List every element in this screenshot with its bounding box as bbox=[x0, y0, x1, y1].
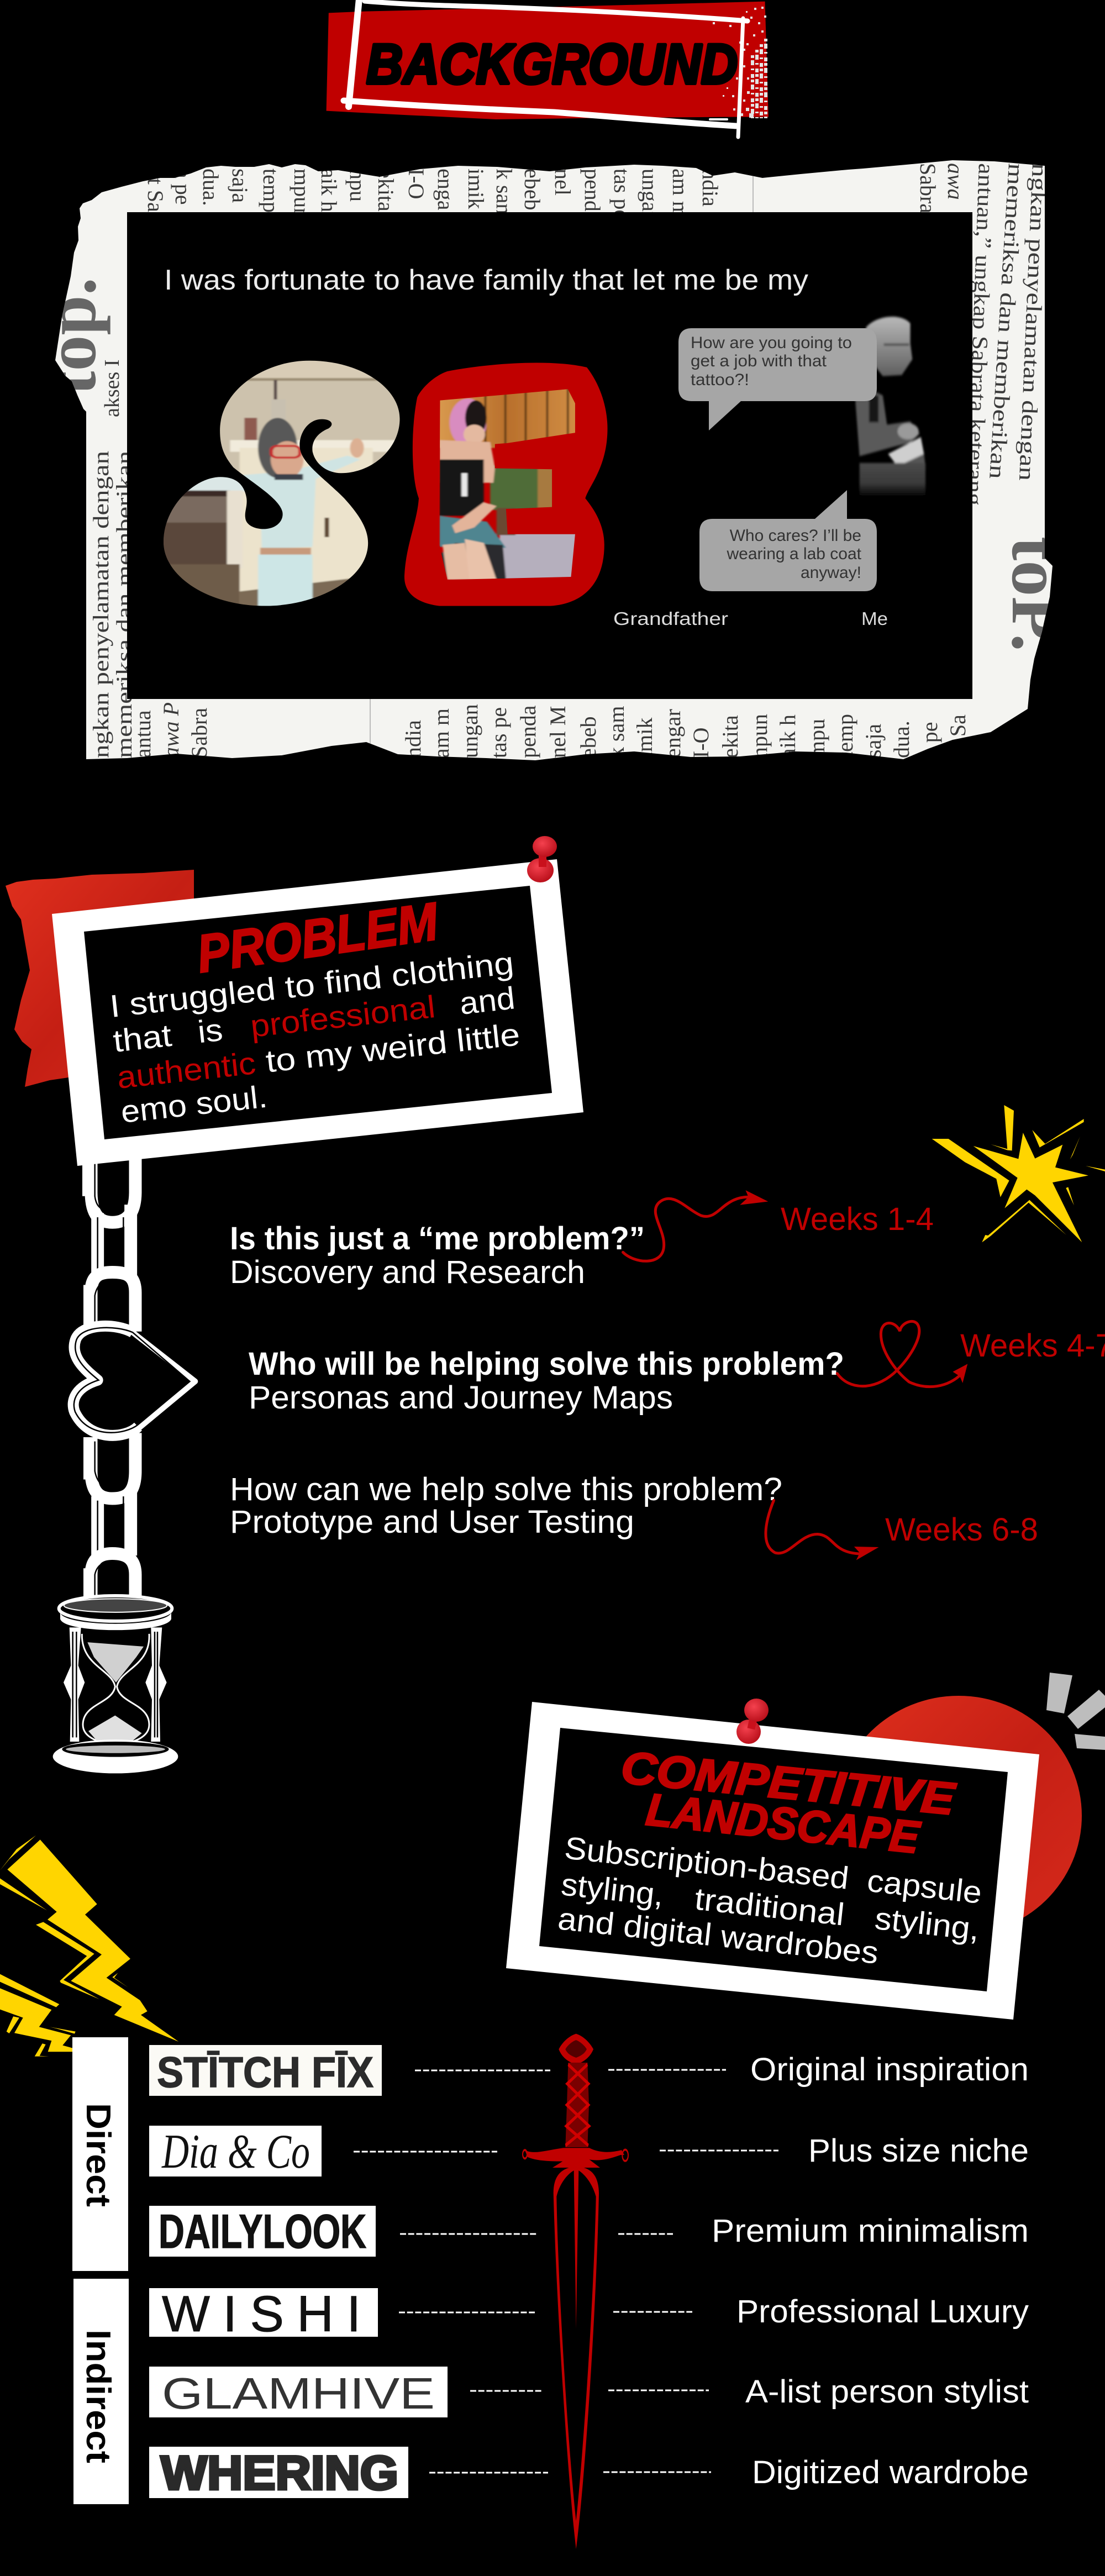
problem text: authentic bbox=[115, 1045, 257, 1096]
heading: competitive: COMPETITIVE bbox=[619, 1742, 958, 1825]
heading: landscape: LANDSCAPE bbox=[644, 1784, 923, 1863]
problem text: to my weird little bbox=[264, 1017, 522, 1080]
label: indirect bbox=[73, 2279, 129, 2504]
grip bbox=[565, 2063, 589, 2147]
landscape text: traditional bbox=[693, 1881, 846, 1933]
grey burst dashes bbox=[1046, 1673, 1105, 1750]
newspaper text: top band: I-O bbox=[404, 169, 429, 199]
speech bubble: grandfather: How are you going to bbox=[691, 334, 852, 352]
photo: grandfather bbox=[855, 317, 925, 497]
newspaper text: bottom band: ndia bbox=[401, 720, 425, 758]
newspaper text: top band: tas pe bbox=[609, 169, 634, 219]
newspaper text: bottom band: ungan bbox=[457, 704, 482, 758]
landscape text: Subscription-based bbox=[563, 1830, 850, 1896]
newspaper text: bottom band: I-O bbox=[688, 727, 713, 758]
step 2 text: Who will be helping solve this problem? bbox=[249, 1346, 844, 1382]
newspaper text: top band: pend bbox=[580, 169, 605, 212]
newspaper text: bottom band: awa P bbox=[159, 702, 183, 758]
newspaper text: top band: antuan,” ungkap Sabrata keterang bbox=[962, 163, 999, 506]
red title block bbox=[327, 2, 769, 119]
icon: yellow starburst bbox=[932, 1105, 1105, 1242]
panel: background story bbox=[127, 212, 972, 699]
step 1 text bbox=[230, 1221, 645, 1290]
white speckle texture bbox=[713, 7, 766, 118]
problem card bbox=[52, 836, 583, 1166]
newspaper text: bottom band: npun bbox=[747, 714, 772, 758]
problem text: and bbox=[458, 980, 517, 1022]
newspaper text: top band: Sabra bbox=[915, 163, 940, 213]
card inner panel bbox=[539, 1728, 1008, 1991]
newspaper text: bottom band: nel M bbox=[545, 706, 570, 758]
white card frame bbox=[506, 1702, 1039, 2020]
chain links bbox=[73, 1150, 195, 1602]
newspaper text: bottom band: am m bbox=[429, 708, 454, 758]
competitor descriptors: Professional Luxury bbox=[736, 2294, 1029, 2330]
intro sentence: I was fortunate to have family that let me be my bbox=[164, 264, 808, 296]
problem text: I struggled to find clothing bbox=[108, 945, 515, 1024]
newspaper text: bottom band: aik h bbox=[775, 714, 800, 758]
step 3 text: Prototype and User Testing bbox=[230, 1504, 634, 1540]
newspaper text: top band: imik bbox=[464, 169, 488, 209]
arrow: squiggle to weeks 6-8 bbox=[766, 1500, 879, 1560]
newspaper text: top band: awa bbox=[943, 163, 968, 200]
problem text: emo soul. bbox=[119, 1079, 269, 1130]
hourglass bbox=[53, 1596, 178, 1773]
pommel bbox=[559, 2034, 593, 2064]
competitor descriptors: A-list person stylist bbox=[745, 2374, 1029, 2410]
newspaper text: top band bbox=[143, 162, 1053, 506]
logo: dailylook: DAILYLOOK bbox=[159, 2205, 366, 2258]
newspaper text: top band: ungan bbox=[638, 169, 662, 223]
newspaper text: top band: ngkan penyelamatan dengan bbox=[1014, 163, 1053, 481]
newspaper text: top band: nel bbox=[550, 169, 575, 196]
newspaper text: bottom band: Sabra bbox=[187, 708, 212, 758]
label: weeks 6-8: Weeks 6-8 bbox=[885, 1512, 1038, 1548]
white card frame bbox=[52, 859, 583, 1166]
newspaper text: top band: aik h bbox=[317, 169, 341, 212]
label: direct: Direct bbox=[79, 2103, 117, 2207]
connector dashes bbox=[354, 2070, 778, 2473]
title text: BACKGROUND bbox=[366, 33, 738, 96]
pin bbox=[527, 836, 557, 882]
label: weeks 1-4: Weeks 1-4 bbox=[781, 1201, 934, 1237]
newspaper text: top band: at Sa bbox=[143, 169, 168, 212]
step 3 text: How can we help solve this problem? bbox=[230, 1471, 782, 1507]
speech bubble: me bbox=[699, 490, 877, 591]
problem heading: PROBLEM bbox=[193, 892, 442, 984]
problem text: professional bbox=[249, 989, 437, 1044]
newspaper text: top band: ekita bbox=[373, 169, 398, 212]
landscape text bbox=[556, 1830, 983, 1971]
panel: torn newspaper bbox=[31, 155, 1076, 768]
caption: me: Me bbox=[861, 608, 888, 629]
arrows bbox=[623, 1190, 967, 1560]
arrow: squiggle to weeks 1-4 bbox=[623, 1190, 768, 1261]
step 1 text: Is this just a “me problem?” bbox=[230, 1221, 645, 1257]
newspaper text: right headline: toP. bbox=[997, 537, 1076, 651]
newspaper text: top band: memeriksa dan memberikan bbox=[985, 162, 1029, 480]
newspaper text: bottom band bbox=[130, 702, 970, 758]
newspaper text: left band bbox=[31, 277, 136, 758]
speech bubble: grandfather bbox=[678, 328, 877, 430]
competitor descriptors bbox=[712, 2052, 1029, 2490]
landscape text: styling, bbox=[560, 1867, 665, 1913]
problem text: that bbox=[111, 1018, 173, 1059]
problem text bbox=[108, 945, 522, 1130]
competitor descriptors: Premium minimalism bbox=[712, 2213, 1029, 2249]
newspaper text: top band: temp bbox=[259, 169, 283, 213]
competitor descriptors: Digitized wardrobe bbox=[752, 2454, 1029, 2490]
newspaper text: left band: top. bbox=[31, 277, 111, 395]
competitive landscape card bbox=[506, 1699, 1039, 2020]
newspaper text: top band: k san bbox=[492, 169, 517, 214]
newspaper text: bottom band: antua bbox=[130, 710, 155, 758]
arrow: heart to weeks 4-7 bbox=[837, 1321, 967, 1387]
photo letter S: childhood photo bbox=[164, 360, 400, 606]
logo: wishi: WISHI bbox=[162, 2286, 361, 2342]
newspaper text: top band: enga bbox=[433, 169, 458, 211]
newspaper text: bottom band: ebeb bbox=[576, 716, 601, 758]
newspaper text: top band: am m bbox=[668, 169, 693, 218]
newspaper text: bottom band: ekita bbox=[718, 715, 743, 758]
newspaper text: bottom band: temp bbox=[833, 714, 857, 758]
newspaper text: bottom band: imik bbox=[632, 718, 657, 758]
newspaper text: top band: npu bbox=[345, 169, 370, 202]
step 3 text bbox=[230, 1471, 782, 1540]
caption: grandfather: Grandfather bbox=[613, 608, 728, 629]
step 2 text bbox=[249, 1346, 844, 1416]
white sketch frame bbox=[344, 0, 748, 137]
guard bbox=[523, 2148, 628, 2168]
speech bubble: me: Who cares? I’ll be bbox=[730, 527, 861, 545]
logo: stitch fix: STĪTCH FĪX bbox=[157, 2048, 373, 2096]
red paper circle bbox=[835, 1696, 1082, 1936]
competitor descriptors: Plus size niche bbox=[808, 2133, 1029, 2169]
competitor descriptors: Original inspiration bbox=[750, 2052, 1029, 2088]
newspaper text: bottom band: engar bbox=[660, 709, 685, 758]
newspaper text: top band: ebeb bbox=[520, 169, 545, 211]
pin bbox=[736, 1699, 769, 1744]
logo: glamhive: GLAMHIVE bbox=[162, 2369, 435, 2418]
newspaper text: top band: mpun bbox=[290, 169, 314, 219]
newspaper text: top band: saja bbox=[228, 169, 252, 203]
heading: background bbox=[327, 0, 769, 137]
icon: lightning bolts bbox=[0, 1836, 178, 2057]
newspaper text: left band: ngkan penyelamatan dengan bbox=[88, 451, 113, 758]
speech bubble: grandfather: get a job with that bbox=[691, 352, 827, 370]
newspaper text: top band: a pe bbox=[171, 169, 196, 205]
newspaper text: top band: dua. bbox=[198, 169, 223, 206]
step 2 text: Personas and Journey Maps bbox=[249, 1380, 673, 1416]
newspaper text: bottom band: mpu bbox=[804, 719, 829, 758]
step 1 text: Discovery and Research bbox=[230, 1254, 585, 1290]
landscape text: styling, bbox=[873, 1901, 981, 1947]
newspaper text: bottom band: dua. bbox=[889, 721, 914, 758]
icon: red sword bbox=[523, 2034, 628, 2549]
newspaper text: bottom band: at Sa bbox=[945, 714, 970, 758]
newspaper text: bottom band: penda bbox=[515, 705, 540, 758]
speech bubble: me: wearing a lab coat bbox=[726, 545, 862, 563]
speech bubble: me: anyway! bbox=[801, 564, 861, 582]
label: direct bbox=[72, 2037, 128, 2271]
card inner panel bbox=[84, 886, 552, 1139]
landscape text: capsule bbox=[865, 1863, 983, 1911]
logo: whering: WHERING bbox=[161, 2447, 398, 2500]
newspaper text: bottom band: saja bbox=[861, 724, 886, 758]
chain and hourglass bbox=[53, 1150, 195, 1773]
label: indirect: Indirect bbox=[79, 2330, 117, 2463]
logo: dia and co: Dia & Co bbox=[161, 2125, 310, 2179]
newspaper text: top band: ndia bbox=[698, 169, 723, 207]
newspaper text: left band: memeriksa dan memberikan bbox=[112, 451, 136, 758]
heart link bbox=[133, 1332, 195, 1429]
landscape text: and digital wardrobes bbox=[556, 1901, 880, 1971]
blade bbox=[554, 2167, 599, 2549]
newspaper text: bottom band: k sam bbox=[604, 706, 629, 758]
torn red paper behind problem card bbox=[6, 870, 194, 1087]
speech bubble: grandfather: tattoo?! bbox=[691, 371, 749, 389]
newspaper text: bottom band: tas pe bbox=[486, 707, 511, 758]
problem text: is bbox=[196, 1012, 224, 1050]
photo letter E: teen photo on red bbox=[404, 363, 608, 606]
newspaper text: bottom band: a pe bbox=[917, 722, 942, 758]
newspaper text: left band: akses I bbox=[101, 360, 124, 417]
